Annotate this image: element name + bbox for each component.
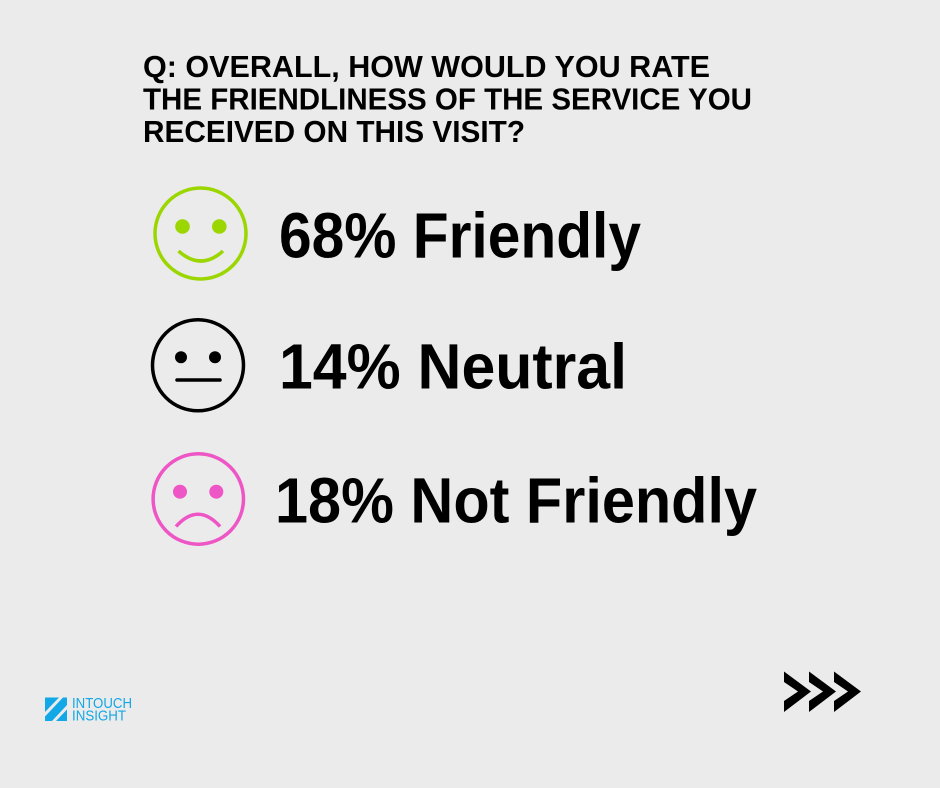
icon: black neutral face <box>152 320 244 411</box>
result: friendly: 68% Friendly <box>279 200 641 272</box>
logo wordmark: INSIGHT <box>72 708 126 724</box>
logo wordmark: INTOUCH <box>72 696 132 712</box>
logo wordmark <box>72 696 132 724</box>
heading: survey question: Q: OVERALL, HOW WOULD YOU RATE <box>143 49 710 84</box>
logo: Intouch Insight <box>45 696 132 724</box>
icon: logo square <box>45 698 67 721</box>
result: not friendly: 18% Not Friendly <box>275 464 757 536</box>
arrow: triple chevrons <box>784 672 861 712</box>
heading: survey question: THE FRIENDLINESS OF THE SERVICE YOU <box>143 82 752 116</box>
heading: survey question <box>143 49 752 149</box>
icon: pink sad face <box>153 454 244 544</box>
icon: green smiley <box>155 188 246 279</box>
result: neutral: 14% Neutral <box>279 330 627 402</box>
heading: survey question: RECEIVED ON THIS VISIT? <box>143 114 525 149</box>
